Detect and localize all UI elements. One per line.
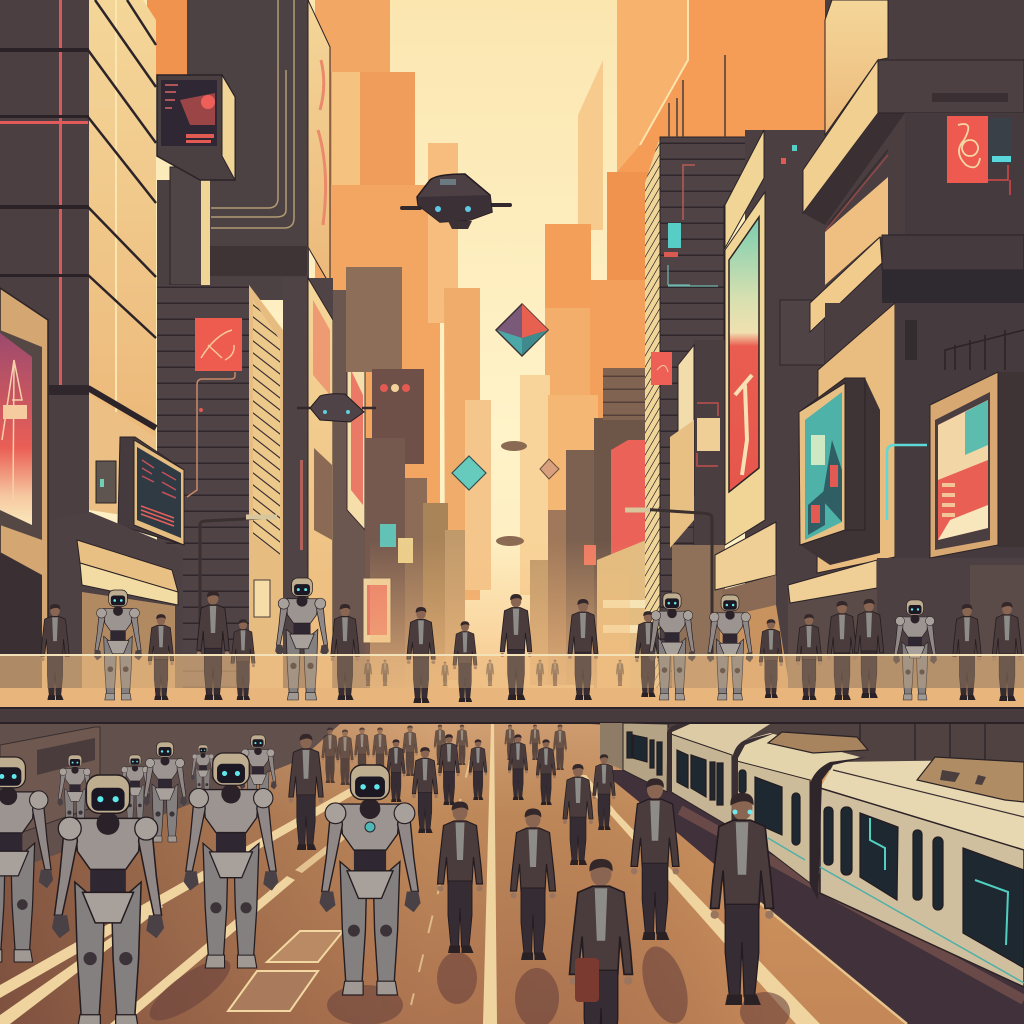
overpass beam [0, 707, 1024, 724]
far-left tower [0, 0, 156, 690]
distant crowd on walkway [364, 660, 624, 686]
right tower with cyan sign [645, 55, 746, 690]
floor panel upper [267, 931, 343, 962]
right billboard: teal poster [799, 378, 880, 565]
flying drone small left [297, 394, 376, 422]
dashed centre-left lane [411, 760, 470, 1005]
hanging box screen [157, 75, 235, 180]
flying drone large [402, 174, 510, 229]
shaft under hanging box [170, 167, 210, 285]
train [600, 723, 1024, 1024]
floating diamond red and teal [496, 304, 548, 356]
second tower [157, 0, 330, 300]
upper row of people and robots [41, 578, 1022, 703]
road lane markings [0, 724, 820, 1024]
rear robots [57, 735, 277, 842]
left billboard: red triangle [0, 288, 48, 690]
lower street surface [0, 724, 1024, 1024]
foreground people [438, 778, 774, 1024]
distant orange towers [147, 0, 827, 605]
shadows on the street [142, 941, 790, 1024]
foreground robots [0, 753, 421, 1024]
receding left buildings [333, 267, 465, 690]
lower back walls [0, 724, 1024, 875]
left screen with code [118, 437, 184, 545]
receding right buildings [530, 368, 646, 690]
haze at end of avenue [370, 540, 630, 690]
glass railing [0, 654, 1024, 688]
distant drones [496, 441, 527, 546]
translucent lower walkway [0, 656, 1024, 708]
floating diamond small [540, 459, 559, 479]
sky backdrop [0, 0, 1024, 720]
far right massive building [788, 0, 1024, 690]
street lamp left [200, 517, 277, 655]
middle lower crowd [289, 734, 615, 865]
train roof units [768, 732, 868, 753]
floor panel lower [228, 971, 318, 1011]
train windows [627, 732, 1024, 968]
left shop awning [50, 512, 183, 690]
crowd in the lower distance [322, 725, 567, 785]
right tower with tall billboard [715, 130, 825, 690]
mid-left building with red sign [157, 278, 333, 690]
street lamp right [625, 509, 712, 655]
floating diamond teal [452, 456, 486, 490]
right billboard: red and cream poster [930, 372, 1024, 558]
